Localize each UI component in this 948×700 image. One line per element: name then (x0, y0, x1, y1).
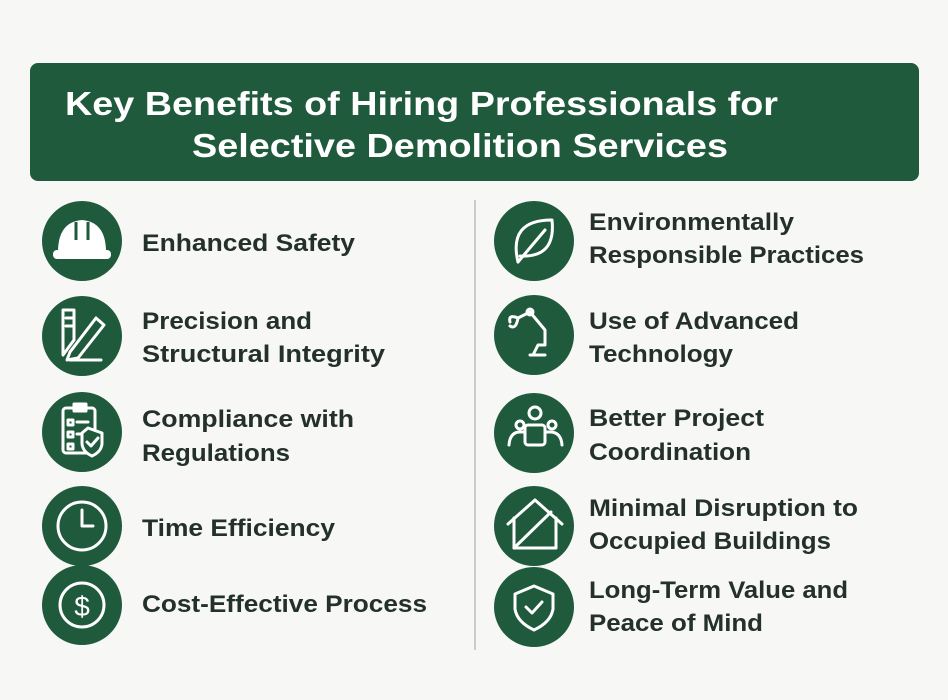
icon: clock (58, 502, 106, 550)
item: Minimal Disruption: Occupied Buildings (589, 528, 831, 555)
item: Compliance: Regulations (142, 440, 290, 467)
icon: clipboard with shield (63, 404, 102, 456)
item: Minimal Disruption (494, 486, 858, 566)
item: Environmental (494, 201, 864, 281)
item: Cost-Effective (42, 565, 427, 645)
item: Time Efficiency: Time Efficiency (142, 515, 336, 542)
item: Technology: Use of Advanced (589, 308, 799, 335)
item: Precision (42, 296, 386, 376)
item: Precision: Structural Integrity (142, 341, 386, 368)
item: Time Efficiency (42, 486, 336, 566)
item: Compliance: Compliance with (142, 406, 354, 433)
icon: ruler and pencil (63, 310, 104, 360)
item: Long-Term Value: Long-Term Value and (589, 577, 848, 604)
icon: dollar coin (60, 583, 104, 627)
item: Enhanced Safety (42, 201, 356, 281)
item: Environmental: Environmentally (589, 209, 795, 236)
icon: hard hat (53, 220, 111, 259)
icon: house crossed (508, 500, 562, 548)
title banner: Selective Demolition Services (192, 127, 728, 164)
item: Coordination: Better Project (589, 405, 764, 432)
icon: robotic arm (510, 309, 545, 355)
title banner (30, 63, 919, 181)
icon: team (509, 407, 562, 445)
item: Long-Term Value: Peace of Mind (589, 610, 763, 637)
icon: leaf (516, 220, 552, 262)
item: Compliance (42, 392, 354, 472)
item: Coordination (494, 393, 764, 473)
item: Cost-Effective: Cost-Effective Process (142, 591, 427, 618)
item: Environmental: Responsible Practices (589, 242, 864, 269)
item: Coordination: Coordination (589, 439, 751, 466)
item: Minimal Disruption: Minimal Disruption to (589, 495, 858, 522)
title banner: Key Benefits of Hiring Professionals for (65, 85, 778, 122)
item: Precision: Precision and (142, 308, 312, 335)
icon: shield check (515, 586, 553, 630)
item: Long-Term Value (494, 567, 848, 647)
icon: dollar coin: $ (74, 591, 90, 622)
item: Technology (494, 295, 799, 375)
item: Technology: Technology (589, 341, 734, 368)
item: Enhanced Safety: Enhanced Safety (142, 230, 356, 257)
